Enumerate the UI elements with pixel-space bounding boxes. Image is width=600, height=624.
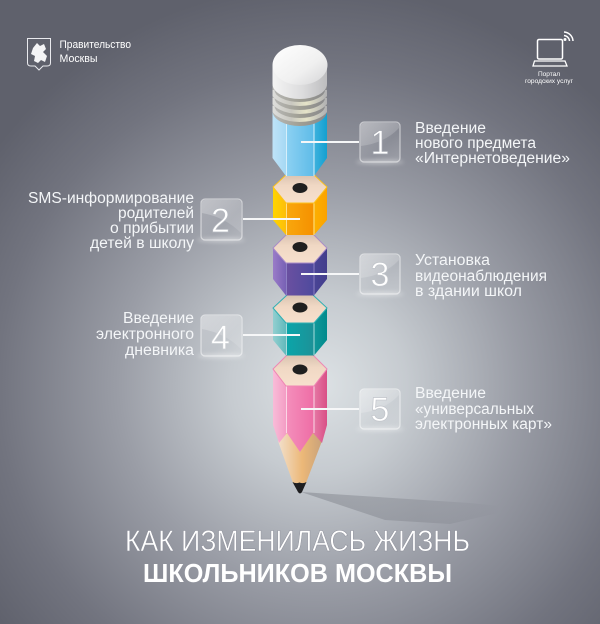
segment: purple <box>273 234 327 296</box>
badge 3 <box>356 254 404 296</box>
callout text 2: о прибытии <box>110 220 194 237</box>
title <box>125 525 470 588</box>
callout text 5: электронных карт» <box>415 416 552 433</box>
callout text 3: в здании школ <box>415 283 522 300</box>
badge 1 <box>356 122 404 164</box>
connector line 1 <box>301 141 359 143</box>
callout 5 <box>301 385 552 433</box>
eraser <box>272 45 328 99</box>
callout text 2: детей в школу <box>90 235 194 252</box>
icon: Moscow coat of arms <box>28 38 50 70</box>
badge 2: 2 <box>211 202 230 240</box>
callout 2 <box>28 190 300 252</box>
callout text 2: родителей <box>118 205 194 222</box>
badge 5: 5 <box>371 391 389 429</box>
callout text 2: SMS-информирование <box>28 190 194 207</box>
badge 1: 1 <box>371 124 389 162</box>
logo text <box>60 39 131 65</box>
callout text 4: Введение <box>123 310 194 327</box>
pencil <box>272 45 328 494</box>
segment: orange <box>273 174 327 235</box>
title: ШКОЛЬНИКОВ МОСКВЫ <box>143 558 452 588</box>
badge 4 <box>197 315 245 358</box>
segment: teal <box>273 295 327 356</box>
title: КАК ИЗМЕНИЛАСЬ ЖИЗНЬ <box>125 525 470 558</box>
badge 5 <box>356 389 404 431</box>
callout text 4 <box>96 310 194 359</box>
connector line 5 <box>301 408 359 410</box>
logo: city services portal <box>525 32 574 85</box>
callout text 3: Установка <box>415 252 490 269</box>
callout 4 <box>96 310 300 359</box>
callout text 2 <box>28 190 194 252</box>
connector line 3 <box>301 273 359 275</box>
portal caption <box>525 71 574 85</box>
callout text 3 <box>415 252 547 300</box>
callout text 5 <box>415 385 552 433</box>
callout text 1: «Интернетоведение» <box>415 150 570 167</box>
callout 3 <box>301 252 547 300</box>
callout text 4: электронного <box>96 326 194 343</box>
callout text 5: «универсальных <box>415 401 534 418</box>
eraser metal ferrule <box>272 85 327 126</box>
callout text 1: нового предмета <box>415 135 536 152</box>
logo text: Москвы <box>60 53 98 65</box>
logo: Government of Moscow <box>28 38 131 70</box>
callout 1 <box>301 120 570 167</box>
badge 3: 3 <box>371 256 389 294</box>
icon: laptop with wifi <box>533 32 573 66</box>
callout text 1: Введение <box>415 120 486 137</box>
callout text 5: Введение <box>415 385 486 402</box>
connector line 4 <box>243 334 300 336</box>
segment: blue <box>272 105 327 176</box>
connector line 2 <box>243 218 300 220</box>
callout text 1 <box>415 120 570 167</box>
badge 4: 4 <box>211 319 230 357</box>
pencil shadow <box>301 492 520 524</box>
portal caption: городских услуг <box>525 78 574 85</box>
segment: pink with wood tip <box>273 355 327 494</box>
portal caption: Портал <box>538 71 560 78</box>
callout text 4: дневника <box>125 342 194 359</box>
logo text: Правительство <box>60 39 131 51</box>
callout text 3: видеонаблюдения <box>415 268 547 285</box>
badge 2 <box>197 199 245 242</box>
